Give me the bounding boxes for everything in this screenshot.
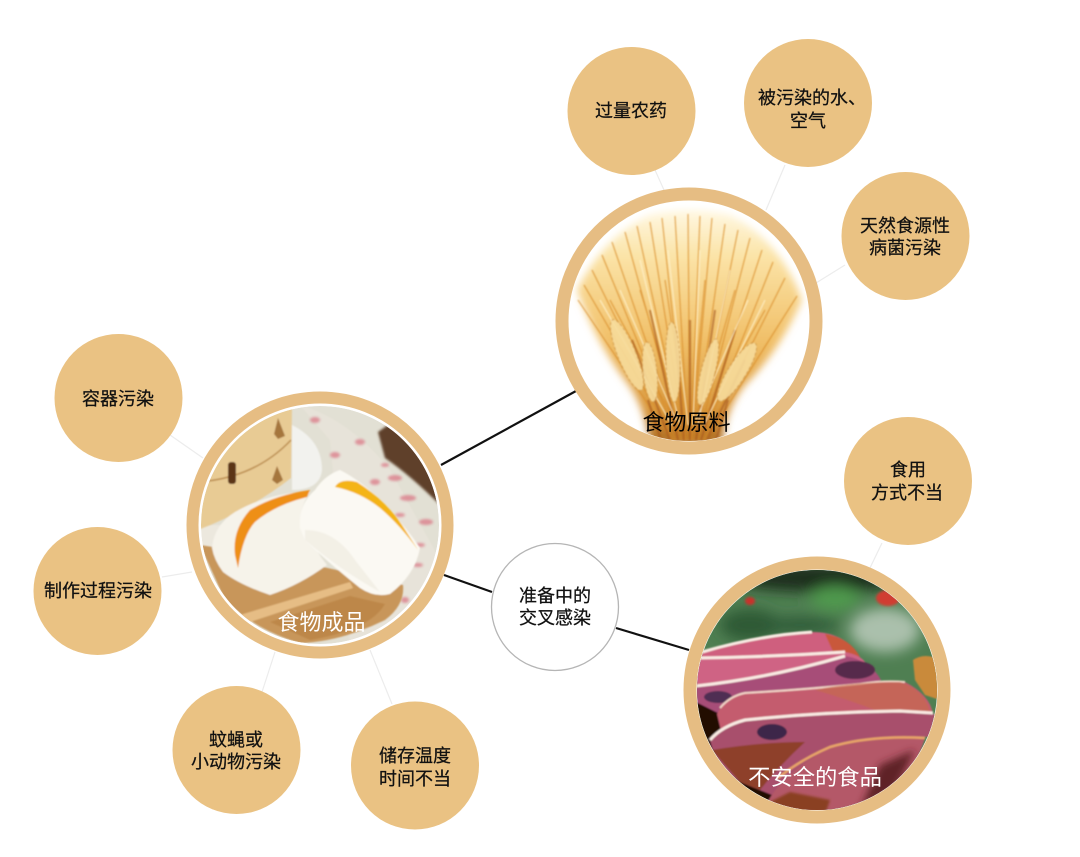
node: storage temperature and time <box>351 702 479 830</box>
label: raw material: 食物原料 <box>642 410 731 435</box>
light connector lines <box>162 165 882 704</box>
sausage 6 <box>768 738 926 810</box>
label: unsafe food: 不安全的食品 <box>748 765 882 790</box>
sausage 1 <box>702 631 844 658</box>
right bun <box>300 470 420 595</box>
panel: raw material circle <box>562 194 816 448</box>
node: natural pathogens <box>842 172 970 300</box>
node: improper eating <box>844 417 972 545</box>
panel: finished food circle <box>192 398 448 652</box>
node: contaminated water and air: 空气 <box>790 111 826 131</box>
node: pesticide: 过量农药 <box>595 101 667 121</box>
node: cross contamination: 准备中的 <box>519 586 591 606</box>
node: production contamination: 制作过程污染 <box>44 581 152 601</box>
node: production contamination <box>34 527 162 655</box>
connector: cross contamination to unsafe food <box>616 628 689 650</box>
sausage 2 <box>696 652 865 686</box>
sausage 3 <box>696 656 881 714</box>
node: improper eating: 方式不当 <box>871 483 943 503</box>
image: wheat bundle <box>577 210 802 445</box>
node: storage temperature and time: 储存温度 <box>379 746 451 766</box>
panel: unsafe food circle <box>690 563 944 820</box>
node: flies and small animals: 小动物污染 <box>191 752 281 772</box>
left bun <box>212 492 327 595</box>
node: container contamination: 容器污染 <box>82 389 154 409</box>
image: steamed buns <box>198 400 443 650</box>
image: grilled sausages <box>695 564 940 820</box>
wheat ears <box>610 318 757 406</box>
sausage 5 <box>710 711 935 795</box>
node: container contamination <box>54 334 182 462</box>
connector: finished food to cross contamination <box>444 575 492 592</box>
node: contaminated water and air: 被污染的水、 <box>758 88 866 108</box>
node: flies and small animals <box>172 686 300 814</box>
steamer <box>198 405 420 643</box>
node: cross contamination <box>492 544 618 670</box>
node: contaminated water and air <box>744 39 872 167</box>
node: cross contamination: 交叉感染 <box>519 608 591 628</box>
node: storage temperature and time: 时间不当 <box>379 769 451 789</box>
plate <box>200 545 403 643</box>
connector: raw material to finished food <box>441 391 576 465</box>
node: pesticide <box>568 47 696 175</box>
node: improper eating: 食用 <box>890 460 926 480</box>
sausage 4 <box>717 681 933 735</box>
node: flies and small animals: 蚊蝇或 <box>209 730 263 750</box>
label: finished food: 食物成品 <box>277 610 366 635</box>
dark wood <box>378 420 440 505</box>
node: natural pathogens: 天然食源性 <box>860 216 950 236</box>
cloth spots <box>310 417 433 603</box>
node: natural pathogens: 病菌污染 <box>869 238 941 258</box>
